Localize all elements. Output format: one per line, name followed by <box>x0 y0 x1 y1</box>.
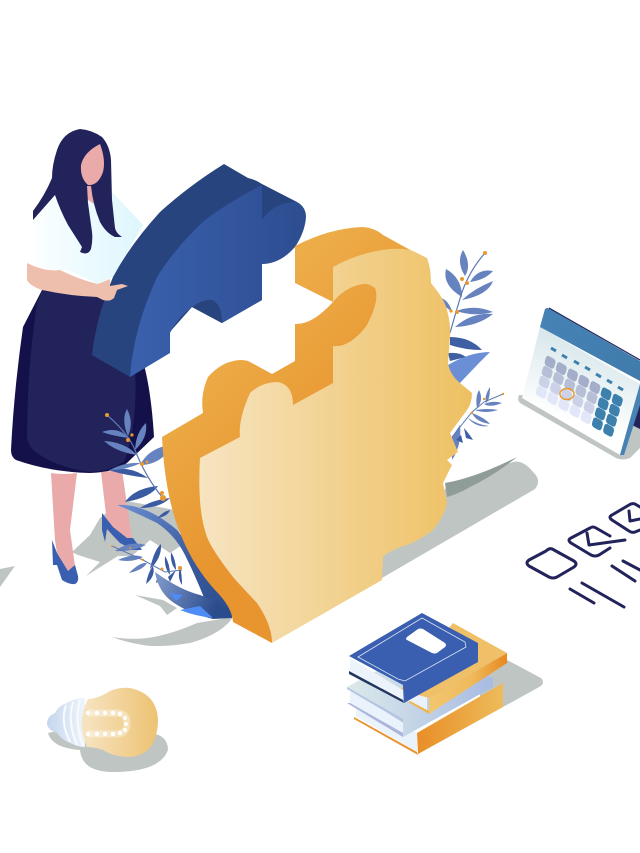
low leaf behind head <box>155 572 232 619</box>
woman: shirt <box>25 193 143 284</box>
woman: arm and hand <box>27 263 128 301</box>
blue puzzle piece <box>92 164 306 377</box>
calendar: page <box>522 327 640 455</box>
checklist: checked box right <box>610 504 640 532</box>
puzzle piece: inner notch <box>192 300 222 323</box>
yellow puzzle head <box>162 227 472 643</box>
books: shadow <box>480 660 543 707</box>
books: top blue book <box>349 613 478 703</box>
calendar: base shadow <box>518 395 640 460</box>
checklist <box>527 504 640 607</box>
head: front face <box>199 249 472 643</box>
puzzle piece: front face <box>130 185 306 377</box>
stack of books <box>347 613 543 755</box>
woman: legs <box>51 470 132 571</box>
woman: skirt <box>11 290 154 473</box>
plant: right sprigs <box>441 250 504 460</box>
puzzle piece: dark side <box>92 164 297 377</box>
calendar: date cells <box>536 356 623 437</box>
plant: left sprigs <box>102 409 232 618</box>
checklist: empty box <box>527 549 576 578</box>
bulb: filament <box>86 711 128 736</box>
calendar: back panel <box>632 400 640 429</box>
bulb: shadow <box>48 725 168 772</box>
books: orange book <box>400 623 507 714</box>
books: bottom orange book <box>354 683 503 755</box>
woman <box>11 129 154 584</box>
books: cover border <box>358 618 466 681</box>
ground shadows <box>0 462 538 646</box>
checklist: text lines <box>570 589 594 603</box>
woman: hair <box>33 129 122 253</box>
bulb: screw base <box>47 698 85 747</box>
woman: shoes <box>52 513 142 584</box>
woman: face <box>81 144 104 185</box>
bulb: glass <box>82 688 158 757</box>
books: light blue book <box>347 650 493 737</box>
checklist: checked box <box>569 527 610 556</box>
calendar <box>518 308 640 460</box>
light bulb <box>47 688 168 772</box>
books: cover label <box>406 628 446 654</box>
calendar: header band <box>540 308 640 381</box>
shadow swoosh behind head <box>445 457 517 497</box>
woman: neck <box>84 182 96 204</box>
calendar: circled date <box>560 388 574 400</box>
calendar: weekday markers <box>551 348 623 390</box>
head: side wall <box>162 227 423 643</box>
